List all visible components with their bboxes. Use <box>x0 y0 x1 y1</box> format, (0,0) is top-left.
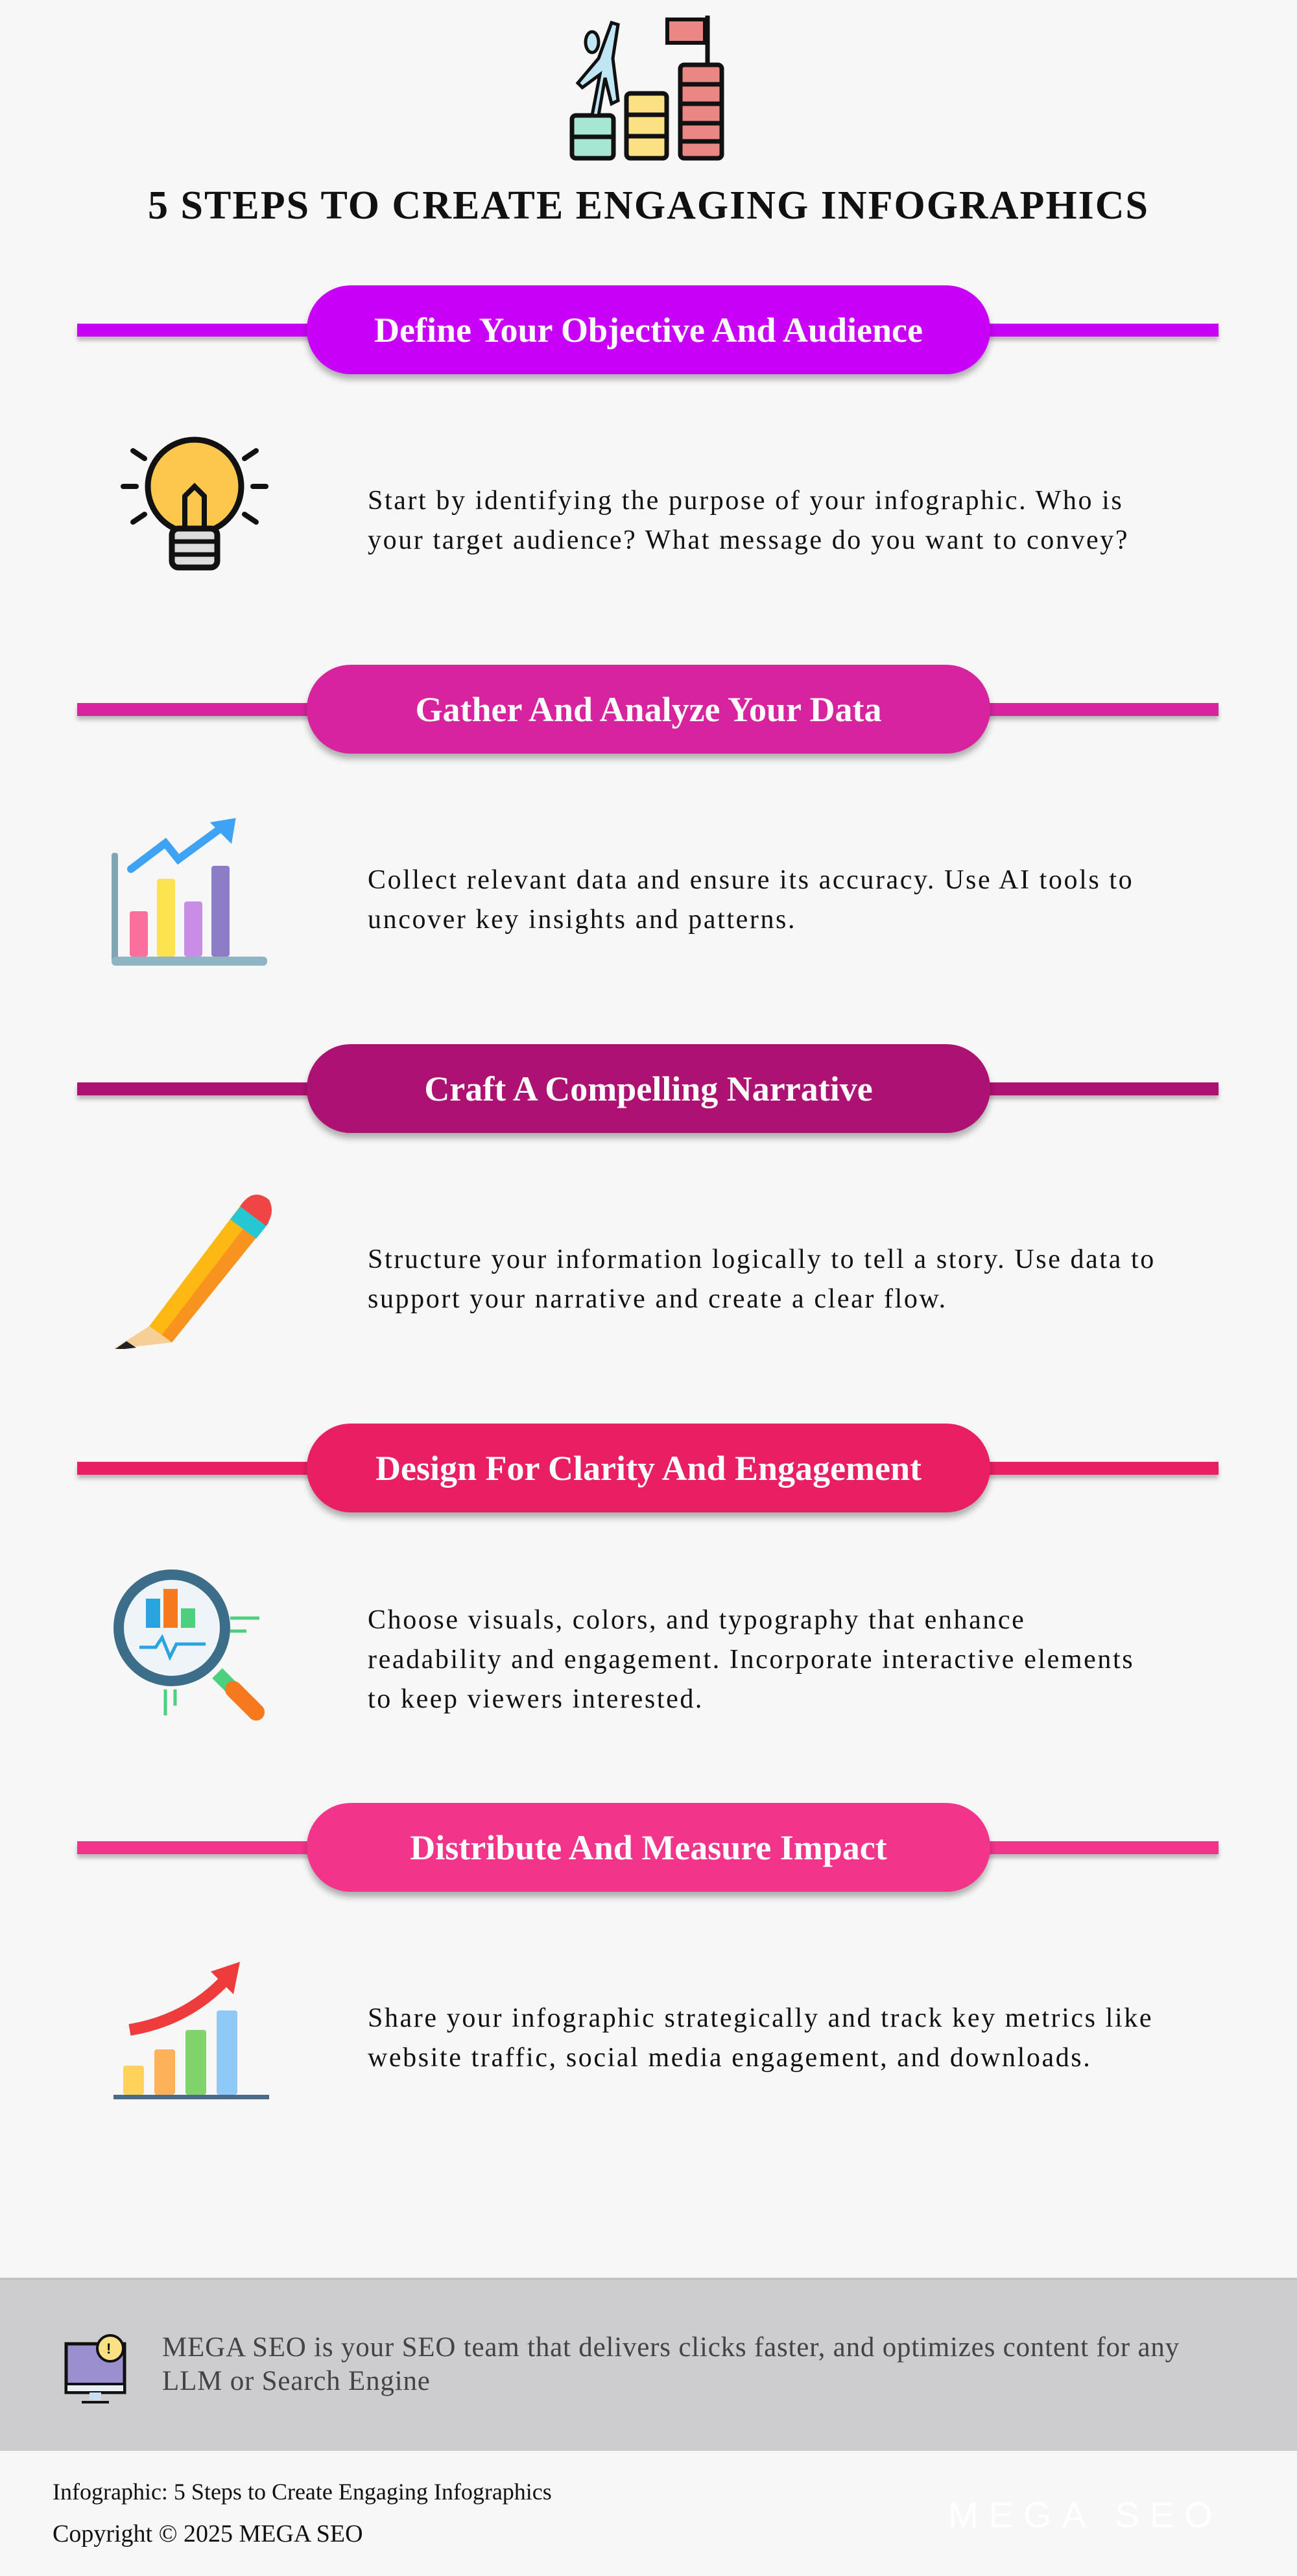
heading: step 4: Design For Clarity And Engagement <box>375 1449 922 1488</box>
icon: light bulb <box>121 437 268 571</box>
text: step 1: Start by identifying the purpose of your infographic. Who is your target audience? What message do you want to convey? <box>368 486 1129 555</box>
icon: monitor <box>65 2334 126 2403</box>
panel: step 3 <box>75 1044 1220 1349</box>
footer logo: MEGA SEO <box>948 2494 1223 2535</box>
icon: climbing steps <box>569 16 724 161</box>
text: promo: MEGA SEO is your SEO team that delivers clicks faster, and optimizes content for any LLM or Search Engine <box>162 2332 1180 2396</box>
panel: step 2 <box>75 665 1220 966</box>
footer text: copyright: Copyright © 2025 MEGA SEO <box>53 2520 363 2547</box>
footer text: title: Infographic: 5 Steps to Create Engaging Infographics <box>53 2479 552 2505</box>
text: step 3: Structure your information logically to tell a story. Use data to support your narrative and create a clear flow. <box>368 1245 1156 1314</box>
heading: step 2 <box>307 665 990 754</box>
heading: step 1 <box>307 285 990 374</box>
heading: step 3 <box>307 1044 990 1133</box>
text: step 2: Collect relevant data and ensure its accuracy. Use AI tools to uncover key insights and patterns. <box>368 865 1134 935</box>
panel: step 1 <box>75 285 1220 571</box>
text: step 4: Choose visuals, colors, and typography that enhance readability and engagement. Incorporate interactive elements to keep viewers interested. <box>368 1605 1134 1714</box>
icon: magnifier analytics <box>113 1569 265 1721</box>
icon: growth chart <box>113 1962 269 2099</box>
icon: monitor: ! <box>106 2341 111 2357</box>
icon: bar chart <box>112 818 267 966</box>
panel: step 4 <box>75 1424 1220 1721</box>
heading: step 5: Distribute And Measure Impact <box>410 1828 887 1866</box>
heading: step 3: Craft A Compelling Narrative <box>424 1069 873 1108</box>
panel: step 5 <box>75 1803 1220 2099</box>
heading: step 4 <box>307 1424 990 1512</box>
panel: promo band <box>0 2278 1297 2451</box>
icon: pencil <box>113 1195 272 1349</box>
footer <box>53 2479 1223 2547</box>
heading: step 1: Define Your Objective And Audience <box>374 310 923 349</box>
heading: step 2: Gather And Analyze Your Data <box>415 690 882 729</box>
title: 5 STEPS TO CREATE ENGAGING INFOGRAPHICS <box>148 184 1149 228</box>
heading: step 5 <box>307 1803 990 1892</box>
text: step 5: Share your infographic strategically and track key metrics like website traffic, social media engagement, and downloads. <box>368 2003 1153 2073</box>
